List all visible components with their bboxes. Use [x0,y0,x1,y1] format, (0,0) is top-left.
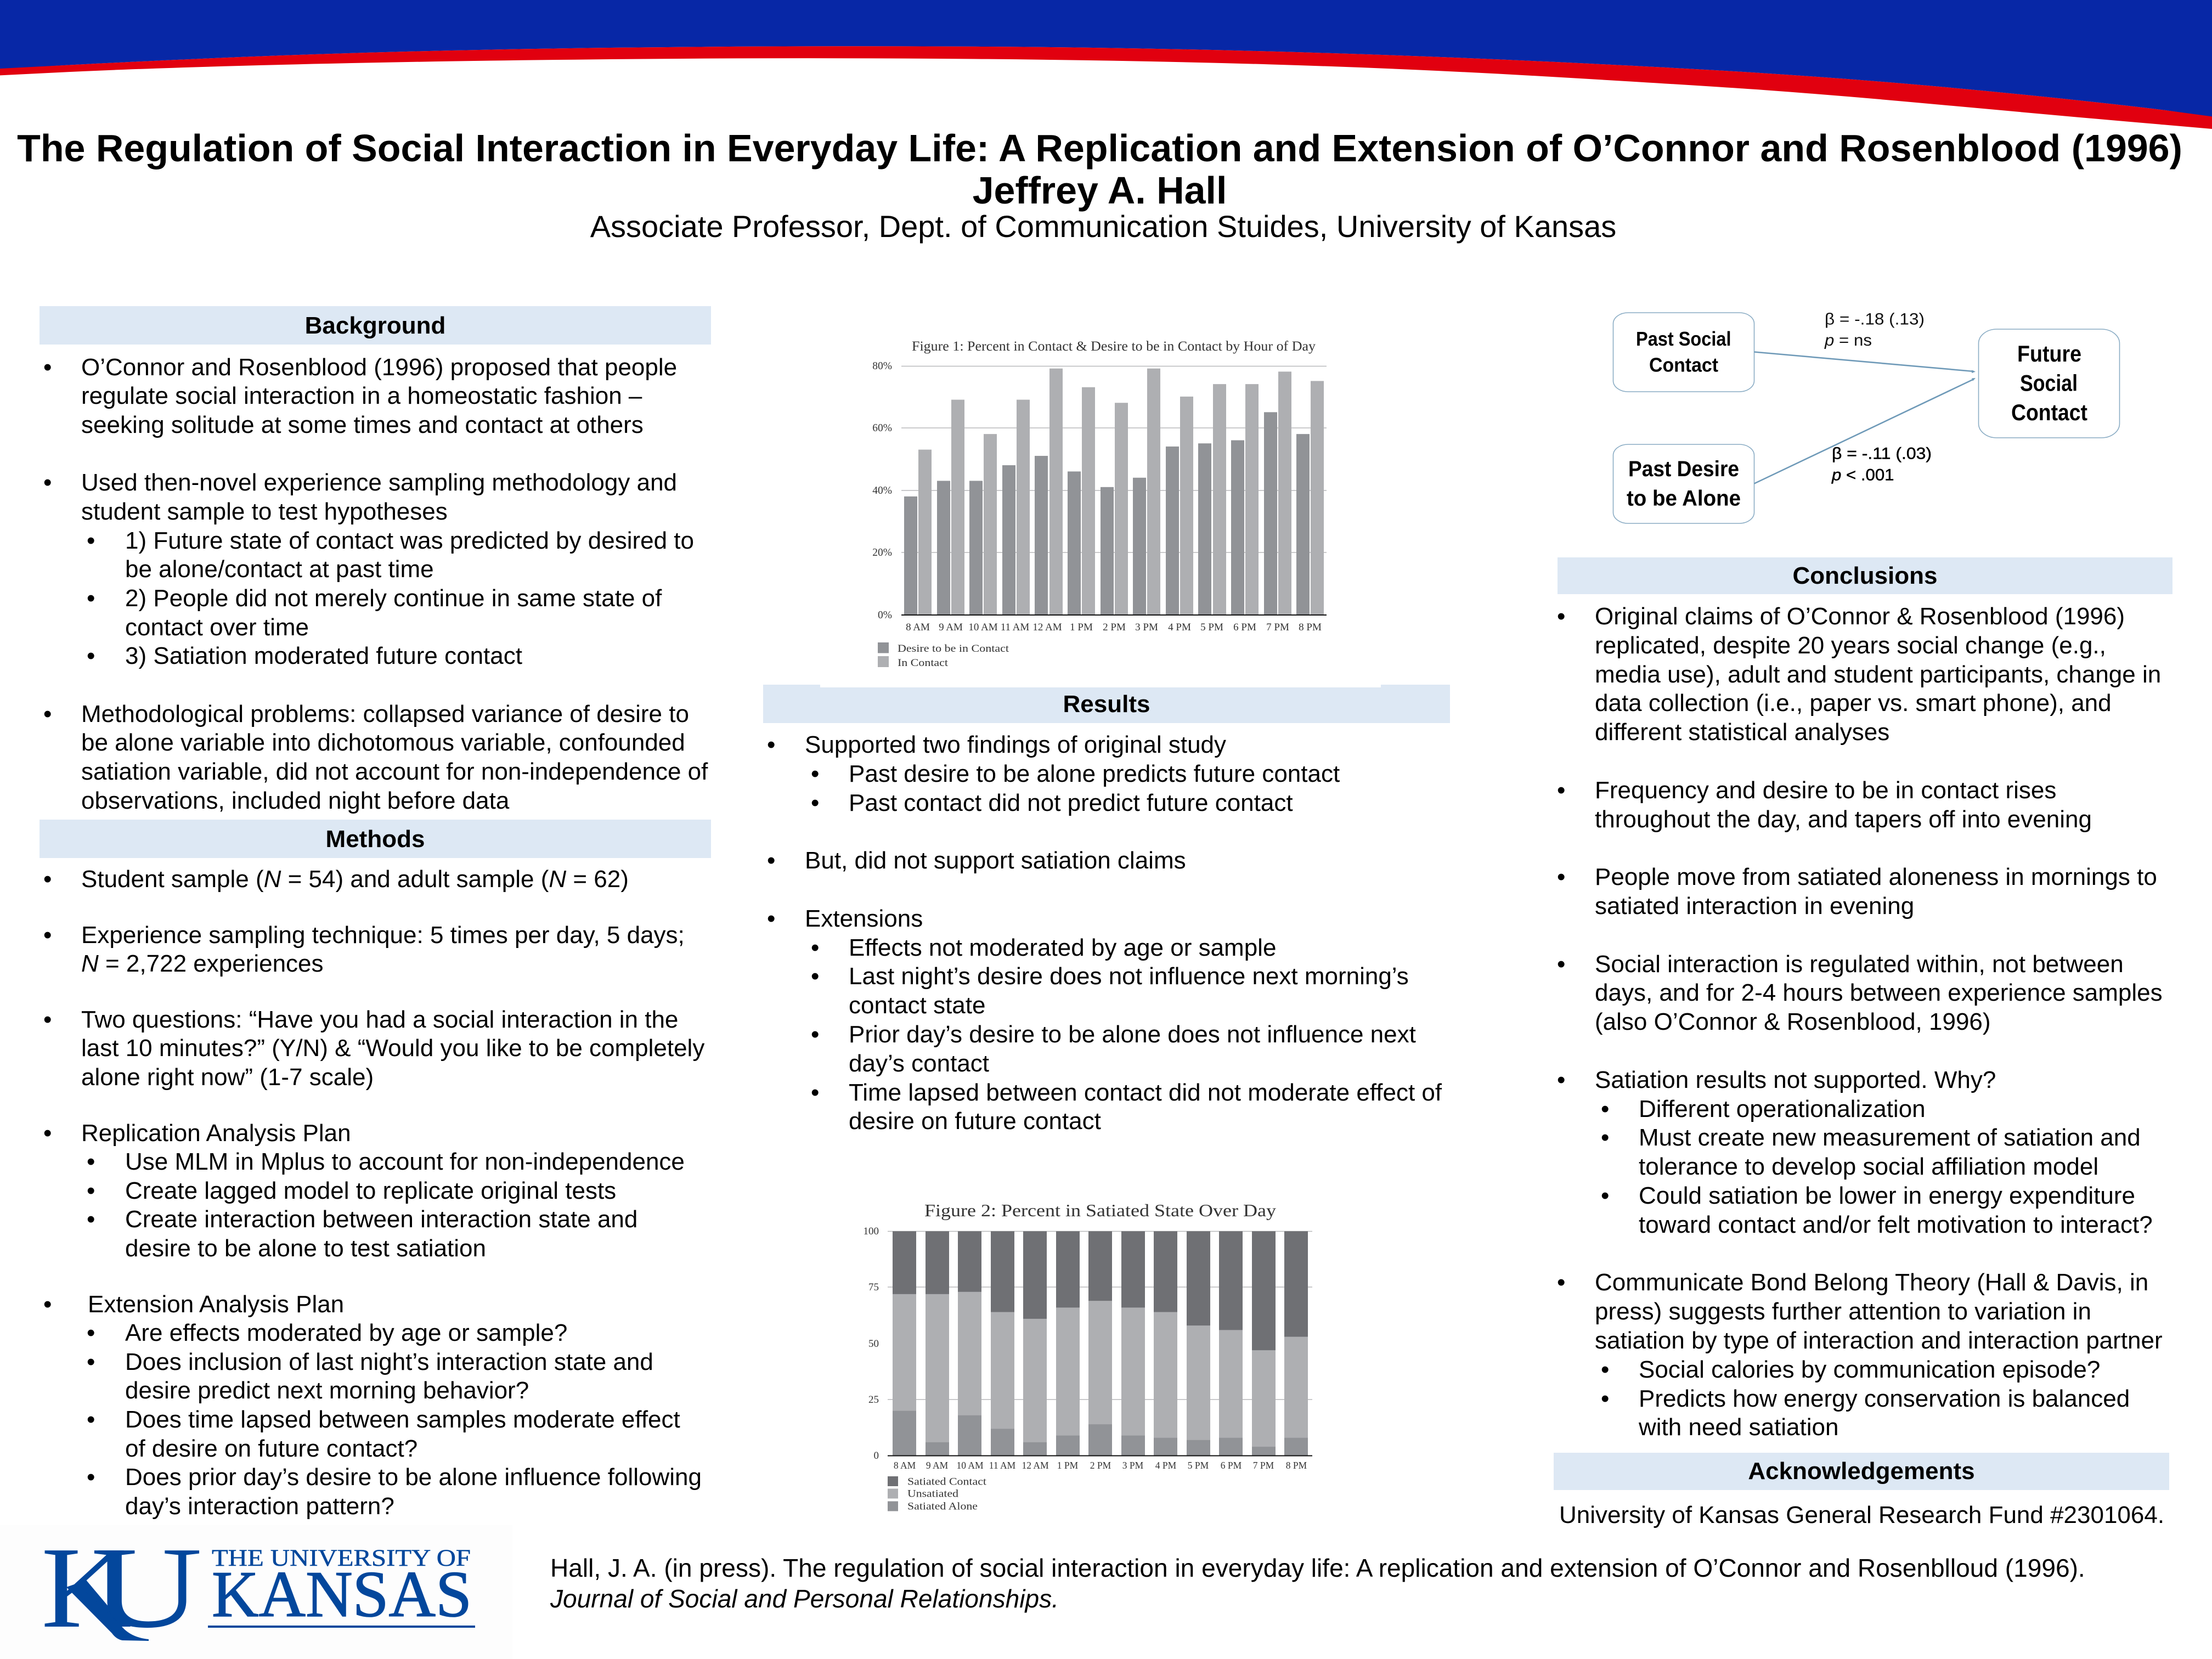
logo: university of kansas [41,1523,475,1652]
stacked bar chart: figure 2 [864,1200,1312,1512]
heading: methods: Methods [326,826,425,853]
bars: desire to be in contact [904,412,1310,615]
text block: conclusions bullets: days, and for 2-4 hours between experience samples [1595,979,2163,1006]
x axis labels: 2 PM [1103,622,1126,633]
text block: background bullets: student sample to test hypotheses [81,498,448,525]
box: past social contact: Contact [1649,353,1718,376]
logo: university of kansas: K [41,1523,132,1652]
x axis labels: 12 AM [1022,1460,1049,1471]
text block: conclusions bullets: Social interaction is regulated within, not between [1595,951,2124,978]
text block: methods bullets: Does inclusion of last night’s interaction state and [125,1348,653,1375]
text block: results bullets [767,731,1442,1135]
x axis labels: 5 PM [1188,1460,1209,1471]
citation: Journal of Social and Personal Relationships. [550,1584,1059,1613]
text block: methods bullets: last 10 minutes?” (Y/N) & “Would you like to be completely [81,1035,704,1062]
panel: background [40,306,711,814]
text block: conclusions bullets: different statistical analyses [1595,719,1889,746]
text block: background bullets: Used then-novel experience sampling methodology and [81,469,677,496]
path coefficient: past contact: p = ns [1824,331,1872,349]
text block: conclusions bullets: (also O’Connor & Rosenblood, 1996) [1595,1008,1991,1035]
x axis labels: 1 PM [1070,622,1093,633]
text block: methods bullets: • [87,1406,95,1433]
text block: conclusions bullets: Different operationalization [1639,1096,1926,1122]
box: future social contact: Social [2020,370,2078,396]
y axis labels: 50 [868,1338,879,1350]
text block: methods bullets: desire predict next morning behavior? [125,1377,529,1404]
text block: conclusions bullets: • [1601,1124,1609,1151]
text block: results bullets: • [811,1021,819,1048]
panel: methods [40,820,711,1520]
text block: results bullets: • [811,789,819,816]
text block: conclusions bullets: tolerance to develop social affiliation model [1639,1153,2098,1180]
text block: background bullets: contact over time [125,614,309,641]
citation [550,1554,2085,1613]
text block: conclusions bullets: • [1557,864,1565,890]
text block: results bullets: day’s contact [849,1050,989,1077]
text block: results bullets: • [811,1079,819,1106]
arrow: past desire to future contact [1754,378,1976,484]
x axis labels: 11 AM [1001,622,1029,633]
text block: methods bullets: Student sample (N = 54) and adult sample (N = 62) [81,866,629,893]
text block: conclusions bullets: Satiation results not supported. Why? [1595,1066,1996,1093]
heading: conclusions: Conclusions [1792,562,1938,589]
x axis labels: 9 AM [926,1460,949,1471]
text block: background bullets: • [43,353,52,381]
text block: conclusions bullets: • [1601,1356,1609,1383]
text block: results bullets: Effects not moderated by age or sample [849,934,1276,961]
text block: background bullets: 2) People did not merely continue in same state of [125,585,662,612]
text block: background bullets: • [43,469,52,496]
x axis labels: 2 PM [1090,1460,1111,1471]
logo: university of kansas: THE UNIVERSITY OF [212,1545,471,1571]
text block: results bullets: • [767,847,775,874]
path coefficient: past contact [1824,311,1925,349]
text block: results bullets: • [767,905,775,932]
header banner [0,0,2212,129]
x axis labels: 4 PM [1155,1460,1177,1471]
text block: conclusions bullets: Frequency and desire to be in contact rises [1595,777,2056,804]
x axis labels: 6 PM [1233,622,1256,633]
heading: acknowledgements: Acknowledgements [1748,1458,1975,1485]
legend [878,642,1009,669]
y axis labels: 80% [872,360,892,372]
x axis labels: 8 AM [894,1460,916,1471]
x axis labels: 10 AM [956,1460,984,1471]
text block: methods bullets: • [43,1120,52,1147]
author name: Jeffrey A. Hall [973,169,1227,212]
text block: methods bullets: • [87,1206,95,1233]
acknowledgement text: University of Kansas General Research Fund #2301064. [1559,1502,2164,1528]
text block: methods bullets: desire to be alone to test satiation [125,1235,486,1262]
y axis labels: 0 [873,1450,879,1462]
title: The Regulation of Social Interaction in Everyday Life: A Replication and Extension of O’Connor and Rosenblood (1996) [17,127,2182,170]
legend [888,1476,987,1512]
text block: methods bullets: N = 2,722 experiences [81,950,324,977]
text block: methods bullets: alone right now” (1-7 scale) [81,1064,374,1091]
text block: methods bullets: Create lagged model to replicate original tests [125,1177,616,1204]
panel: results [763,685,1450,1135]
text block: background bullets: seeking solitude at some times and contact at others [81,411,644,438]
text block: results bullets: Past contact did not predict future contact [849,789,1293,816]
box: past desire to be alone: to be Alone [1627,486,1741,510]
text block: methods bullets: • [43,866,52,893]
text block: background bullets: observations, included night before data [81,787,509,814]
text block: conclusions bullets: • [1601,1385,1609,1412]
text block: results bullets: • [767,731,775,758]
text block: results bullets: Past desire to be alone predicts future contact [849,760,1340,787]
text block: conclusions bullets: Communicate Bond Belong Theory (Hall & Davis, in [1595,1269,2148,1296]
y axis labels: 25 [868,1394,879,1406]
text block: results bullets: • [811,934,819,961]
text block: conclusions bullets: data collection (i.e., paper vs. smart phone), and [1595,690,2112,716]
text block: background bullets: • [87,642,95,669]
text block: background bullets: O’Connor and Rosenblood (1996) proposed that people [81,353,677,381]
text block: results bullets: contact state [849,992,985,1019]
x axis labels: 10 AM [968,622,998,633]
x axis labels [906,622,1322,633]
text block: methods bullets: Replication Analysis Plan [81,1120,351,1147]
path coefficient: past contact: β = -.18 (.13) [1825,311,1925,328]
text block: background bullets: satiation variable, did not account for non-independence of [81,758,708,785]
panel: conclusions [1557,557,2172,1441]
bars: satiated alone [893,1411,1308,1456]
text block: results bullets: Last night’s desire does not influence next morning’s [849,963,1409,990]
x axis labels: 3 PM [1122,1460,1144,1471]
text block: methods bullets: Extension Analysis Plan [88,1291,344,1318]
text block: conclusions bullets: press) suggests further attention to variation in [1595,1298,2091,1325]
text block: conclusions bullets: Social calories by communication episode? [1639,1356,2100,1383]
text block: methods bullets: • [87,1177,95,1204]
text block: methods bullets: of desire on future contact? [125,1435,417,1462]
y axis labels: 100 [864,1226,879,1237]
text block: methods bullets: • [87,1319,95,1346]
panel: acknowledgements [1554,1453,2169,1528]
x axis labels: 12 AM [1032,622,1062,633]
text block: methods bullets: Does time lapsed between samples moderate effect [125,1406,680,1433]
x axis labels: 1 PM [1057,1460,1079,1471]
x axis labels: 4 PM [1168,622,1191,633]
heading: results [763,685,1450,723]
legend: Satiated Contact [907,1476,987,1488]
text block: conclusions bullets: Must create new measurement of satiation and [1639,1124,2141,1151]
x axis labels [894,1460,1307,1471]
text block: background bullets: 1) Future state of contact was predicted by desired to [125,527,694,554]
text block: conclusions bullets: throughout the day, and tapers off into evening [1595,806,2092,833]
y axis labels [872,360,892,621]
text block: conclusions bullets: People move from satiated aloneness in mornings to [1595,864,2157,890]
text block: conclusions bullets: • [1557,1066,1565,1093]
x axis labels: 7 PM [1253,1460,1274,1471]
text block: background bullets: Methodological problems: collapsed variance of desire to [81,701,689,727]
x axis labels: 11 AM [989,1460,1016,1471]
heading: methods [40,820,711,858]
box: past desire to be alone: Past Desire [1628,457,1739,481]
heading: acknowledgements [1554,1453,2169,1490]
x axis labels: 8 PM [1286,1460,1307,1471]
text block: methods bullets [43,866,704,1520]
path coefficient: past desire [1831,444,1932,484]
y axis labels: 40% [872,485,892,496]
text block: background bullets: • [43,701,52,727]
text block: background bullets: be alone variable into dichotomous variable, confounded [81,729,685,756]
text block: conclusions bullets: • [1557,951,1565,978]
path coefficient: past desire: β = -.11 (.03) [1832,444,1932,463]
text block: results bullets: • [811,963,819,990]
text block: conclusions bullets: Predicts how energy conservation is balanced [1639,1385,2130,1412]
text block: conclusions bullets: media use), adult and student participants, change in [1595,661,2161,688]
logo: university of kansas: KANSAS [212,1558,472,1630]
text block: conclusions bullets: toward contact and/or felt motivation to interact? [1639,1211,2153,1238]
x axis labels: 8 PM [1299,622,1322,633]
text block: results bullets: • [811,760,819,787]
text block: methods bullets: Experience sampling technique: 5 times per day, 5 days; [81,922,685,949]
citation: Hall, J. A. (in press). The regulation of social interaction in everyday life: A replication and extension of O’Connor and Rosenblloud (1996). [550,1554,2085,1582]
box: past desire to be alone [1613,444,1754,523]
text block: background bullets: • [87,585,95,612]
x axis labels: 7 PM [1266,622,1289,633]
text block: methods bullets: • [87,1148,95,1175]
arrow: past contact to future contact [1754,352,1976,373]
box: past social contact: Past Social [1636,328,1731,350]
text block: methods bullets: • [43,1291,52,1318]
x axis labels: 6 PM [1221,1460,1242,1471]
chart title: Figure 1: Percent in Contact & Desire to be in Contact by Hour of Day [912,339,1316,354]
y axis labels [864,1226,879,1462]
text block: conclusions bullets: • [1601,1182,1609,1209]
text block: methods bullets: Create interaction between interaction state and [125,1206,637,1233]
text block: conclusions bullets: Could satiation be lower in energy expenditure [1639,1182,2135,1209]
text block: methods bullets: Does prior day’s desire to be alone influence following [125,1464,702,1491]
text block: methods bullets: • [43,922,52,949]
bars: unsatiated [893,1292,1308,1456]
legend: In Contact [898,657,949,669]
text block: background bullets: 3) Satiation moderated future contact [125,642,522,669]
text block: methods bullets: Two questions: “Have you had a social interaction in the [81,1006,678,1033]
x axis labels: 3 PM [1135,622,1158,633]
x axis labels: 9 AM [939,622,963,633]
text block: results bullets: Supported two findings of original study [805,731,1226,758]
text block: methods bullets: Use MLM in Mplus to account for non-independence [125,1148,685,1175]
text block: conclusions bullets: with need satiation [1639,1414,1838,1441]
heading: conclusions [1558,557,2172,594]
text block: conclusions bullets: Original claims of O’Connor & Rosenblood (1996) [1595,603,2125,630]
y axis labels: 20% [872,547,892,558]
box: past social contact [1613,313,1754,392]
path coefficient: past desire: p < .001 [1831,466,1894,484]
heading: results: Results [1063,691,1150,718]
y axis labels: 75 [868,1282,879,1293]
box: future social contact [1978,329,2120,438]
text block: methods bullets: day’s interaction pattern? [125,1493,394,1520]
text block: conclusions bullets: • [1557,1269,1565,1296]
text block: methods bullets: • [87,1464,95,1491]
box: future social contact: Future [2017,341,2081,366]
x axis labels: 8 AM [906,622,930,633]
text block: conclusions bullets: satiated interaction in evening [1595,893,1914,919]
path diagram [1613,311,2120,524]
text block: background bullets: be alone/contact at past time [125,556,434,583]
legend: Unsatiated [907,1488,959,1500]
text block: results bullets: But, did not support satiation claims [805,847,1186,874]
legend: Desire to be in Contact [898,643,1009,654]
text block: background bullets [43,353,708,814]
bar chart: figure 1 [820,339,1381,687]
text block: background bullets: regulate social interaction in a homeostatic fashion – [81,382,642,409]
text block: conclusions bullets: • [1557,603,1565,630]
text block: methods bullets: Are effects moderated by age or sample? [125,1319,567,1346]
text block: methods bullets: • [43,1006,52,1033]
text block: results bullets: Time lapsed between contact did not moderate effect of [849,1079,1442,1106]
bars: in contact [918,369,1324,615]
y axis labels: 60% [872,422,892,434]
affiliation: Associate Professor, Dept. of Communication Stuides, University of Kansas [590,209,1616,244]
text block: results bullets: Extensions [805,905,923,932]
text block: conclusions bullets: replicated, despite 20 years social change (e.g., [1595,632,2106,659]
bars: satiated contact (full stack background) [893,1231,1308,1456]
chart title: Figure 2: Percent in Satiated State Over Day [924,1200,1276,1220]
x axis labels: 5 PM [1200,622,1223,633]
logo: university of kansas: U [91,1523,202,1652]
text block: results bullets: Prior day’s desire to be alone does not influence next [849,1021,1416,1048]
text block: results bullets: desire on future contact [849,1108,1101,1135]
heading: background [40,306,711,345]
text block: conclusions bullets [1557,603,2163,1441]
text block: conclusions bullets: • [1601,1096,1609,1122]
text block: conclusions bullets: • [1557,777,1565,804]
legend: Satiated Alone [907,1501,978,1512]
text block: background bullets: • [87,527,95,554]
text block: conclusions bullets: satiation by type of interaction and interaction partner [1595,1327,2163,1354]
text block: methods bullets: • [87,1348,95,1375]
heading: background: Background [305,312,445,339]
box: future social contact: Contact [2011,399,2087,425]
y axis labels: 0% [878,610,892,621]
